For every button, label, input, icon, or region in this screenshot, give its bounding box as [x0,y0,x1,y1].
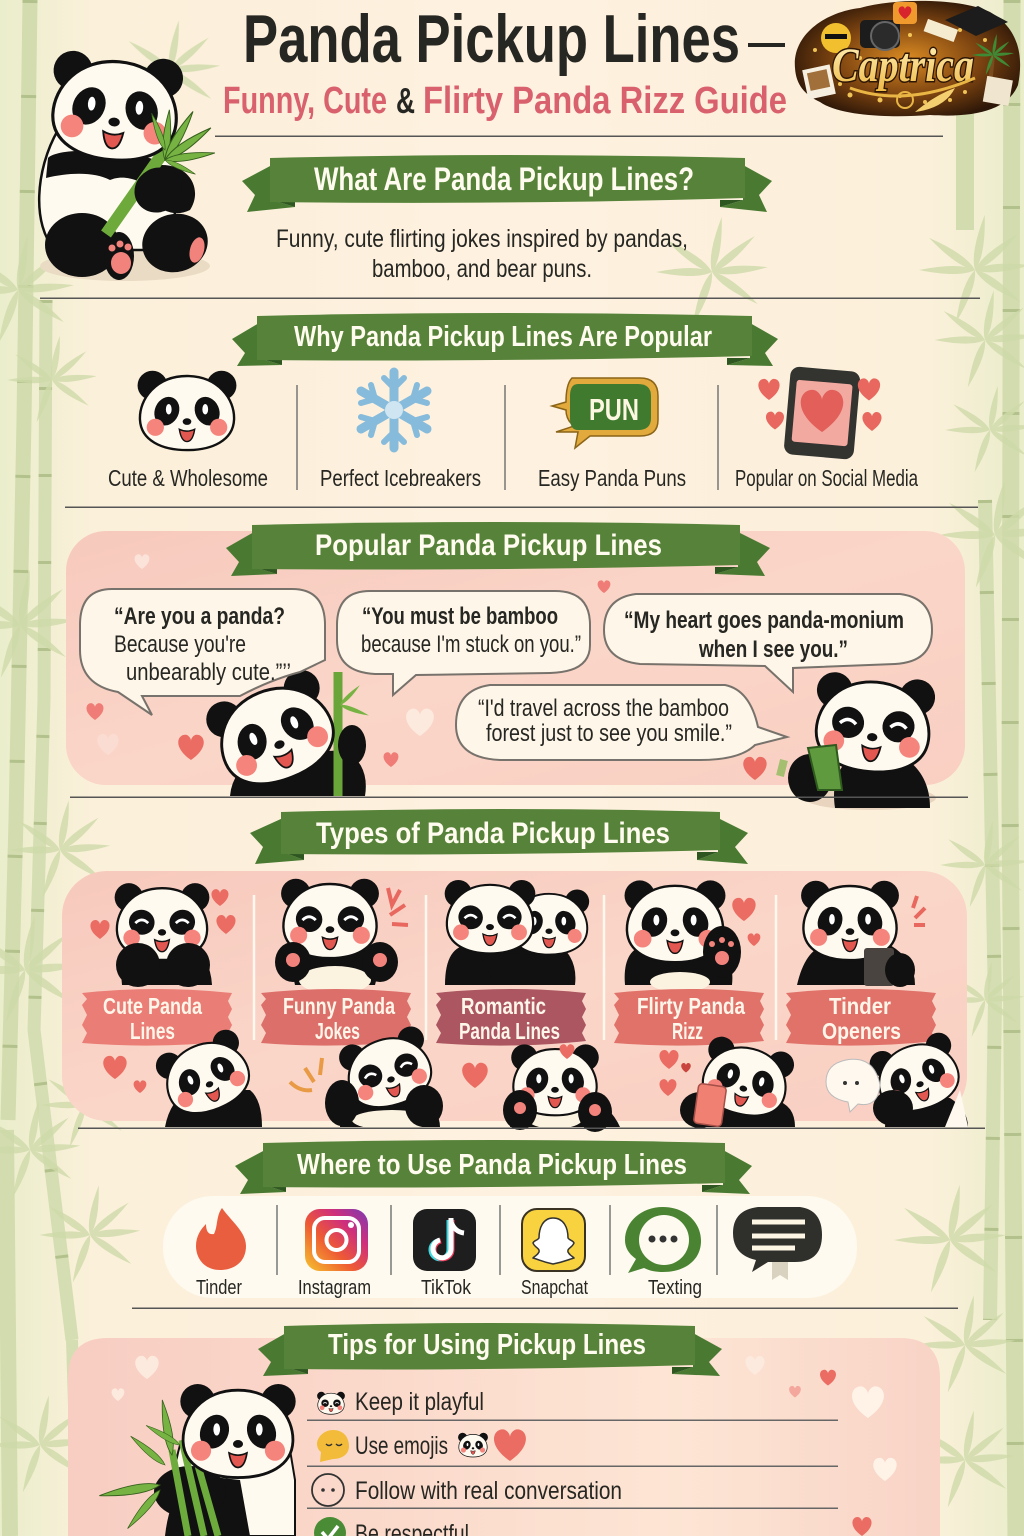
panda: funny [275,879,408,994]
panda: tinder [797,881,925,987]
heading ribbon: what are panda pickup lines: What Are Panda Pickup Lines? [314,161,694,197]
speech bubble 2: “You must be bamboo [362,603,558,630]
speech bubble 1: Because you're [114,631,246,658]
panel: popular pickup lines [66,522,965,810]
icon: message bubble with ribbon [733,1207,822,1280]
heading ribbon: popular lines: Popular Panda Pickup Lines [315,529,662,562]
heading ribbon: popular lines [226,522,770,576]
divider [132,1308,958,1309]
panda: lower row tinder with chat bubble [826,1029,968,1127]
label: tinder openers: Tinder [829,993,891,1019]
labels: why popular [108,465,918,491]
label: funny panda jokes [261,989,411,1046]
definition text: Funny, cute flirting jokes inspired by pandas, [276,225,688,253]
tip: keep it playful [317,1388,484,1416]
panel: types of pickup lines [62,809,968,1132]
labels: why popular: Perfect Icebreakers [320,465,481,491]
divider [215,136,943,137]
labels: apps: Tinder [196,1277,242,1299]
panda with bamboo [201,665,370,799]
icon: instagram [305,1209,368,1271]
label: romantic panda lines [436,989,586,1046]
divider [70,796,968,798]
labels: apps: Texting [648,1277,702,1299]
speech bubble 3: “My heart goes panda-monium [624,607,904,634]
bamboo border: left [0,0,221,1536]
heading ribbon: types [250,809,748,864]
panda: lower row romantic [462,1044,620,1132]
icon: snowflake [361,372,427,448]
heading ribbon: what are panda pickup lines [242,155,772,212]
heading ribbon: where to use [235,1140,752,1194]
panda: cute [90,883,236,987]
tip: use emojis [317,1429,526,1462]
icon: panda face [138,371,236,450]
subtitle [223,80,787,122]
panda: lower row funny [290,1023,443,1130]
panda mascot holding bamboo [39,49,215,281]
speech bubble 4: forest just to see you smile.” [486,720,732,747]
speech bubble 3 [604,594,932,692]
logo: Captrica: Captrica [832,39,974,92]
icon: tinder flame [196,1208,246,1270]
subtitle: Funny, Cute [223,80,387,122]
app strip pill [163,1196,857,1298]
heading ribbon: why popular: Why Panda Pickup Lines Are Popular [294,321,712,353]
labels: why popular: Cute & Wholesome [108,465,268,491]
labels: apps: TikTok [421,1277,472,1299]
speech bubble 1: unbearably cute.”’’ [126,659,291,686]
tip: follow with real conversation [312,1474,622,1506]
heading ribbon: types: Types of Panda Pickup Lines [316,817,670,850]
speech bubble 4: “I'd travel across the bamboo [478,695,729,722]
speech bubble 1: “Are you a panda? [114,603,285,630]
divider [65,506,978,508]
speech bubble 2: because I'm stuck on you.” [361,631,581,658]
heading ribbon: tips [258,1323,722,1376]
logo: Captrica [795,1,1020,116]
label: cute panda lines: Cute Panda [103,993,202,1019]
panda hugging bamboo [99,1384,296,1536]
icon: snapchat [522,1209,585,1271]
icon: PUN speech bubble: PUN [589,392,639,427]
label: cute panda lines: Lines [130,1018,175,1044]
divider [78,1128,985,1129]
tip: use emojis: Use emojis [355,1432,448,1460]
subtitle: & [396,80,415,121]
label: tinder openers: Openers [822,1018,901,1044]
speech bubble 4 [456,685,787,760]
tip: be respectful [314,1517,469,1536]
icon: phone with hearts [758,366,882,460]
label: tinder openers [786,989,936,1046]
icon: tiktok [413,1209,476,1271]
labels: apps: Snapchat [521,1277,588,1299]
label: romantic panda lines: Panda Lines [459,1018,560,1044]
label: funny panda jokes: Jokes [315,1018,360,1044]
heading ribbon: why popular [232,313,778,366]
labels: why popular: Easy Panda Puns [538,465,686,491]
label: flirty panda rizz: Rizz [672,1018,703,1044]
panda with phone [780,671,937,810]
section: why popular [108,313,918,491]
heading ribbon: where to use: Where to Use Panda Pickup Lines [297,1149,687,1181]
speech bubble 1 [80,589,325,715]
heading ribbon: tips: Tips for Using Pickup Lines [328,1329,646,1361]
label: flirty panda rizz: Flirty Panda [637,993,745,1019]
divider [40,298,980,299]
title: Panda Pickup Lines [243,1,740,77]
icon: texting bubble [625,1207,701,1273]
icon: PUN speech bubble [552,378,658,448]
panel: tips [68,1323,940,1536]
panda: romantic couple [445,880,589,985]
tip: keep it playful: Keep it playful [355,1388,484,1416]
speech bubble 2 [337,591,590,695]
labels: apps: Instagram [298,1277,371,1299]
label: funny panda jokes: Funny Panda [283,993,395,1019]
speech bubble 3: when I see you.” [698,636,848,663]
label: cute panda lines [82,989,232,1046]
panda: lower row cute [103,1026,262,1127]
tip: follow with real conversation: Follow with real conversation [355,1477,622,1505]
definition text: bamboo, and bear puns. [372,255,592,283]
definition text [276,225,688,283]
labels: apps [196,1277,702,1299]
section: where to use [163,1140,857,1299]
labels: why popular: Popular on Social Media [735,465,918,491]
bamboo border: right [656,0,1024,1536]
label: flirty panda rizz [614,989,764,1046]
label: romantic panda lines: Romantic [461,993,546,1019]
panda: lower row flirty with phone [659,1034,797,1128]
subtitle: Flirty Panda Rizz Guide [423,80,787,122]
panda: flirty [625,880,760,992]
